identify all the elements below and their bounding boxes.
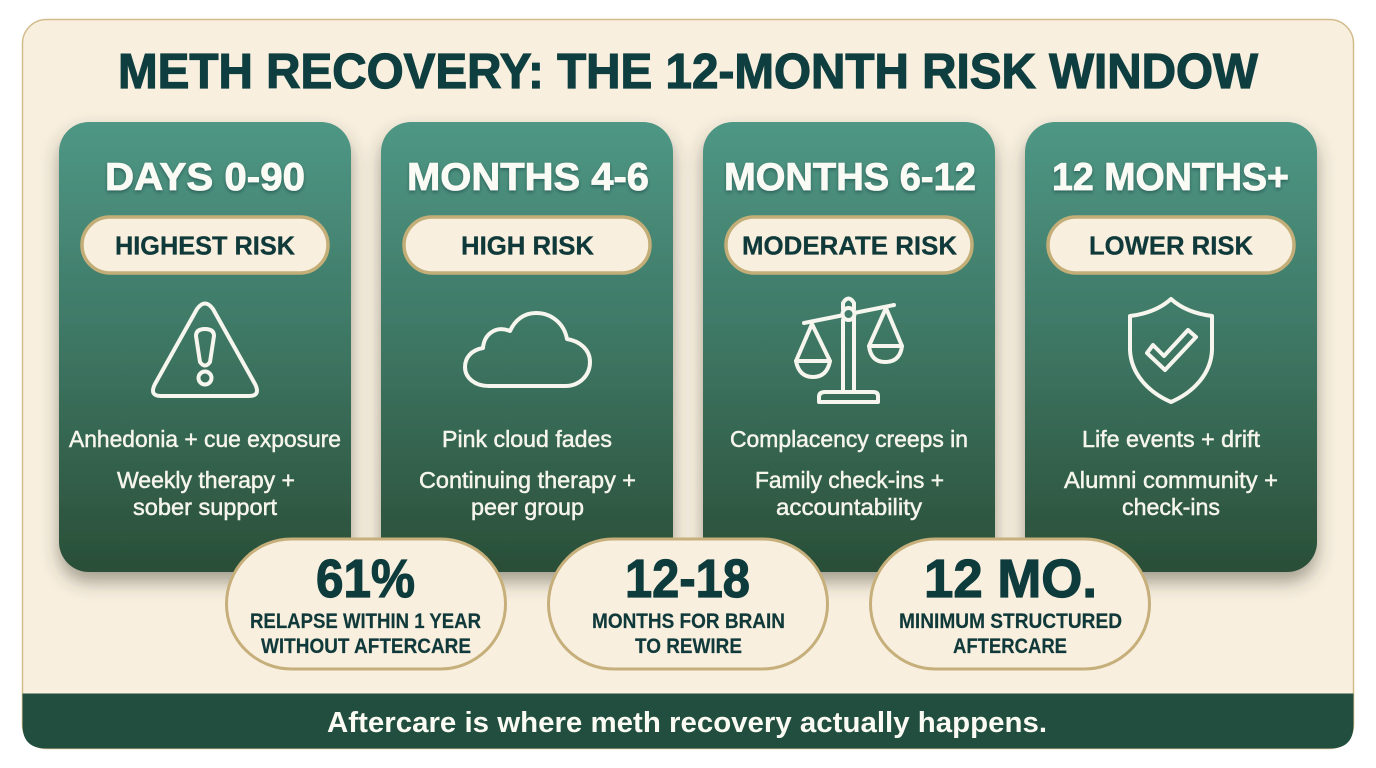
risk badge: lower risk: LOWER RISK [1089, 230, 1253, 260]
heading: months 4-6: MONTHS 4-6 [407, 156, 649, 199]
text: support: Continuing therapy + [419, 467, 636, 493]
heading: 12 months plus: 12 MONTHS+ [1052, 156, 1289, 199]
text: support: peer group [471, 494, 584, 520]
stat: 12 mo. minimum: 12 MO. [924, 549, 1097, 609]
stat: 61% relapse: 61% [316, 549, 415, 609]
panel: months 4-6 [381, 122, 673, 572]
text: support [1064, 467, 1278, 520]
text: support [117, 467, 295, 520]
text: challenge: Pink cloud fades [442, 426, 612, 452]
footer banner: Aftercare is where meth recovery actually happens. [327, 707, 1047, 739]
text: challenge: Complacency creeps in [730, 426, 968, 452]
text: challenge: Anhedonia + cue exposure [69, 426, 341, 452]
risk badge: highest risk [82, 217, 328, 273]
risk badge: high risk [404, 217, 650, 273]
risk badge: moderate risk: MODERATE RISK [742, 230, 957, 260]
text: support: sober support [133, 494, 277, 520]
stat: 61% relapse [226, 539, 506, 669]
footer banner [22, 694, 1354, 748]
text: challenge: Life events + drift [1082, 426, 1260, 452]
stat: 61% relapse: RELAPSE WITHIN 1 YEAR [250, 610, 481, 633]
stat: 12 mo. minimum: AFTERCARE [953, 635, 1067, 658]
risk badge: moderate risk [726, 217, 972, 273]
risk badge: high risk: HIGH RISK [461, 230, 594, 260]
icon: warning triangle [153, 304, 257, 396]
panel: months 6-12 [703, 122, 995, 572]
risk badge: highest risk: HIGHEST RISK [115, 230, 295, 260]
stat: 12 mo. minimum: MINIMUM STRUCTURED [899, 610, 1122, 633]
icon: balance scales [796, 298, 902, 402]
heading: days 0-90: DAYS 0-90 [105, 156, 305, 199]
text: support: accountability [776, 494, 922, 520]
stat: 12 mo. minimum [870, 539, 1150, 669]
risk badge: lower risk [1048, 217, 1294, 273]
panel: days 0-90 [59, 122, 351, 572]
stat: 12-18 months: MONTHS FOR BRAIN [592, 610, 785, 633]
text: support [419, 467, 636, 520]
panel: 12 months plus [1025, 122, 1317, 572]
text: support: check-ins [1122, 494, 1220, 520]
title: METH RECOVERY: THE 12-MONTH RISK WINDOW [118, 45, 1259, 99]
stat: 12-18 months: 12-18 [625, 549, 750, 609]
stat: 61% relapse: WITHOUT AFTERCARE [261, 635, 471, 658]
text: support: Weekly therapy + [117, 467, 295, 493]
icon: shield with check [1130, 299, 1212, 402]
stat: 12-18 months: TO REWIRE [635, 635, 742, 658]
stat: 12-18 months [548, 539, 828, 669]
text: support [755, 467, 944, 520]
icon: cloud [465, 313, 590, 386]
text: support: Alumni community + [1064, 467, 1278, 493]
heading: months 6-12: MONTHS 6-12 [724, 156, 976, 199]
text: support: Family check-ins + [755, 467, 944, 493]
